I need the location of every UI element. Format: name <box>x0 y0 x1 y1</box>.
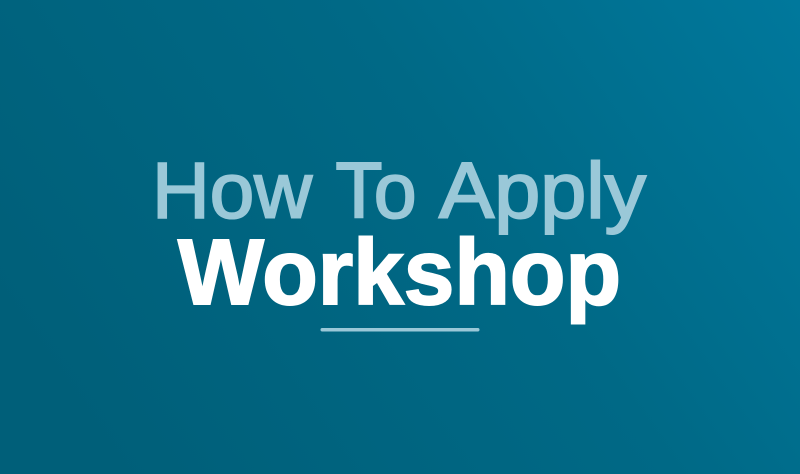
heading: How To Apply <box>152 146 647 234</box>
heading: How To Apply: To <box>336 146 416 234</box>
heading: Workshop: Workshop <box>178 220 621 324</box>
underline rule <box>320 328 480 332</box>
heading: How To Apply: How <box>152 146 313 234</box>
heading: How To Apply: Apply <box>439 146 647 234</box>
